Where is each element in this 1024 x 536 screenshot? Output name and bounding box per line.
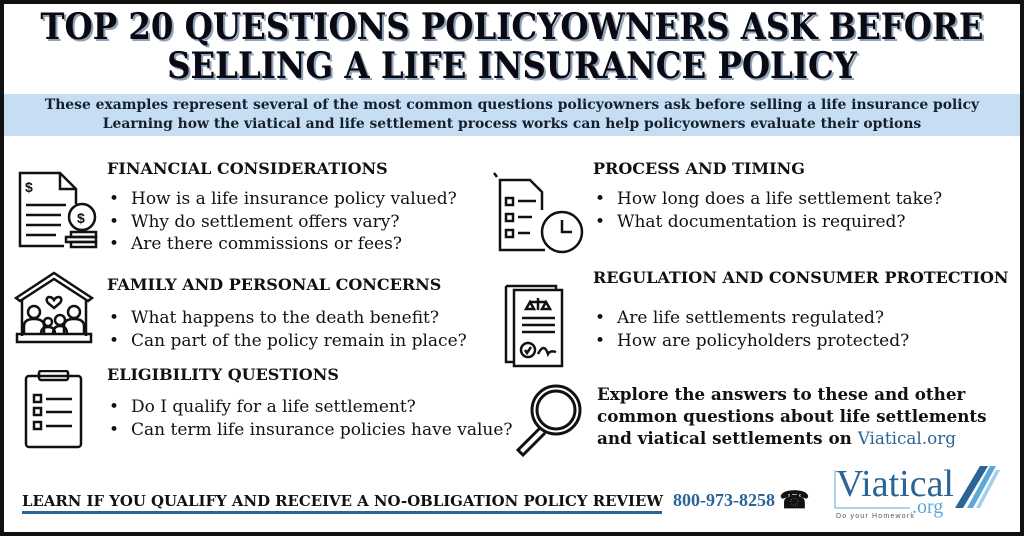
heading: regulation: REGULATION AND CONSUMER PROTECTION [593,268,1009,287]
icon: family house [14,272,94,344]
logo: Viatical.org: Do your Homework [836,513,915,520]
icon: checklist clipboard [24,370,82,448]
bullets: eligibility: Do I qualify for a life settlement? [131,397,416,417]
logo: Viatical.org [834,463,1000,520]
subtitle band: These examples represent several of the most common questions policyowners ask before selling a life insurance policy [45,97,979,113]
icon: financial document with coins: $ [77,210,85,226]
explore text [597,384,987,448]
icon: financial document with coins: $ [25,179,33,195]
heading: eligibility: ELIGIBILITY QUESTIONS [107,365,339,384]
bullets: process: How long does a life settlement take? [617,189,942,209]
bullets: financial: How is a life insurance policy valued? [131,189,457,209]
title [40,6,984,87]
call to action: LEARN IF YOU QUALIFY AND RECEIVE A NO-OBLIGATION POLICY REVIEW 800-973-8258 ☎ [22,488,809,514]
explore text: and viatical settlements on Viatical.org [597,428,956,448]
bullets: financial [112,189,457,254]
heading: financial: FINANCIAL CONSIDERATIONS [107,159,388,178]
logo: Viatical.org: .org [912,496,943,518]
bullets: financial: Why do settlement offers vary? [131,212,399,232]
bullets: process: What documentation is required? [617,212,906,232]
bullets: family: What happens to the death benefit? [131,308,439,328]
icon: legal document [504,284,564,368]
explore text: common questions about life settlements [597,406,987,426]
bullets: regulation [598,308,909,350]
logo: Viatical.org: Viatical [836,463,954,505]
icon: financial document with coins [18,172,98,248]
title: SELLING A LIFE INSURANCE POLICY [167,45,857,87]
subtitle band: Learning how the viatical and life settlement process works can help policyowners evaluate their options [103,116,921,132]
bullets: eligibility: Can term life insurance policies have value? [131,420,513,440]
bullets: process [598,189,942,232]
bullets: financial: Are there commissions or fees? [131,234,402,254]
bullets: regulation: How are policyholders protected? [617,330,909,350]
explore text: Explore the answers to these and other [597,384,965,404]
bullets: family: Can part of the policy remain in place? [131,330,467,350]
bullets: eligibility [112,397,513,440]
icon: document with clock [493,172,584,254]
heading: family: FAMILY AND PERSONAL CONCERNS [107,275,441,294]
heading: process: PROCESS AND TIMING [593,159,805,178]
bullets: family [112,308,467,350]
title: TOP 20 QUESTIONS POLICYOWNERS ASK BEFORE [40,6,984,48]
subtitle band [4,94,1020,136]
bullets: regulation: Are life settlements regulated? [617,308,884,328]
icon: magnifying glass [516,384,582,457]
